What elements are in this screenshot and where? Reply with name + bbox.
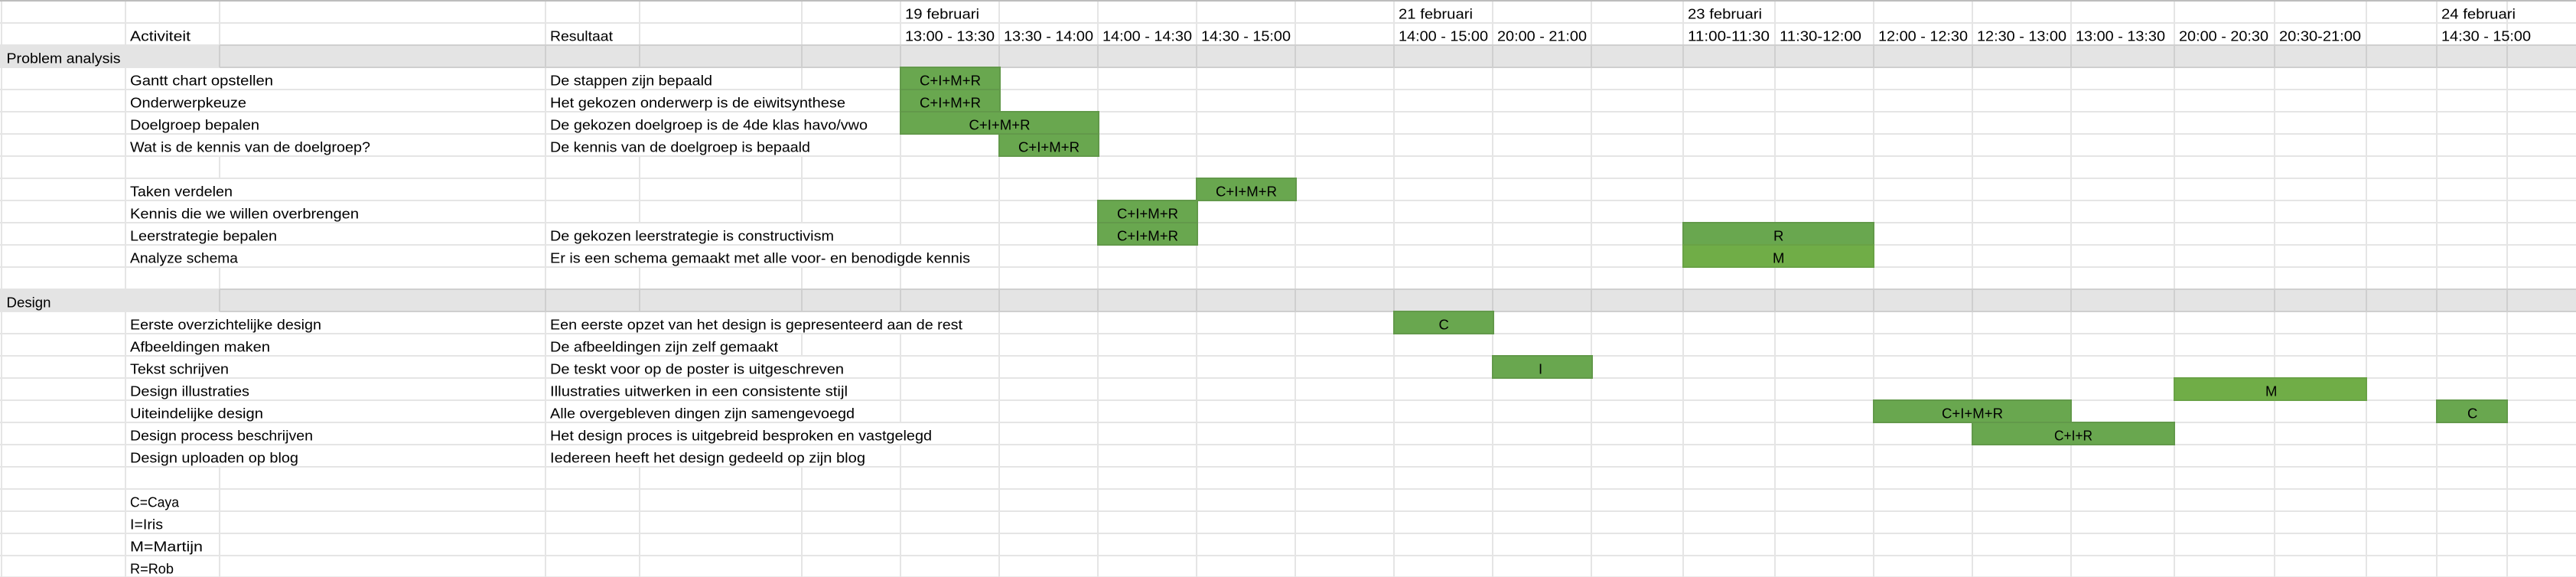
- text block: problem analysis activities: Taken verdelen: [130, 184, 233, 199]
- column heading: activity: Activiteit: [130, 28, 191, 44]
- column headers: dates and time slots: [130, 6, 2531, 44]
- time slots row: 13:30 - 14:00: [1004, 28, 1093, 44]
- time slots row: 20:00 - 21:00: [1497, 28, 1587, 44]
- bar: Uiteindelijke design C: [2437, 400, 2507, 422]
- bar: Gantt chart opstellen: C+I+M+R: [920, 72, 981, 89]
- legend: team member initials: I=Iris: [130, 516, 163, 533]
- text block: problem analysis results: De gekozen doelgroep is de 4de klas havo/vwo: [550, 116, 868, 133]
- bar: Design illustraties M: M: [2265, 383, 2277, 399]
- bar: Analyze schema M: M: [1773, 249, 1784, 266]
- text block: design activities: Afbeeldingen maken: [130, 338, 270, 355]
- text block: design results: Iedereen heeft het design gedeeld op zijn blog: [550, 450, 865, 465]
- bar: Onderwerpkeuze: C+I+M+R: [920, 95, 981, 110]
- text block: problem analysis activities: Gantt chart opstellen: [130, 72, 273, 89]
- text block: problem analysis results: De gekozen leerstrategie is constructivism: [550, 228, 834, 243]
- legend: team member initials: C=Caya: [130, 494, 180, 510]
- text block: problem analysis activities: [130, 72, 370, 266]
- heading: design: Design: [6, 294, 50, 311]
- bar: Doelgroep bepalen: [900, 112, 1099, 134]
- bar: Design process: C+I+R: [2054, 427, 2092, 444]
- text block: problem analysis activities: Analyze schema: [130, 249, 239, 266]
- date: 21 februari: 21 februari: [1399, 6, 1473, 21]
- bar: Kennis overbrengen: [1098, 200, 1197, 223]
- heading: problem analysis: Problem analysis: [6, 51, 121, 66]
- bar: Doelgroep bepalen: C+I+M+R: [969, 116, 1030, 133]
- text block: design results: Het design proces is uitgebreid besproken en vastgelegd: [550, 427, 932, 444]
- bar: Onderwerpkeuze: [900, 90, 1000, 112]
- bar: Taken verdelen: [1197, 178, 1296, 200]
- bar: Design process: [1972, 422, 2174, 445]
- legend: team member initials: M=Martijn: [130, 539, 203, 554]
- text block: design activities: Tekst schrijven: [130, 361, 229, 377]
- time slots row: 20:00 - 20:30: [2179, 28, 2268, 44]
- bar: kennis van de doelgroep: C+I+M+R: [1018, 139, 1080, 155]
- panel: design section band: [0, 288, 2576, 312]
- text block: design results: Illustraties uitwerken in een consistente stijl: [550, 383, 848, 399]
- bar: Leerstrategie bepalen: C+I+M+R: [1117, 228, 1178, 243]
- time slots row: 13:00 - 13:30: [2076, 28, 2165, 44]
- text block: design results: De afbeeldingen zijn zelf gemaakt: [550, 338, 778, 355]
- text block: design activities: Design process beschrijven: [130, 427, 313, 444]
- time slots row: 12:00 - 12:30: [1878, 28, 1968, 44]
- text block: problem analysis results: [550, 72, 970, 266]
- bar: Leerstrategie R: [1683, 223, 1874, 245]
- bar: Eerste design C: [1394, 311, 1493, 334]
- bar: Design illustraties M: [2174, 378, 2366, 400]
- time slots row: 14:00 - 15:00: [1399, 28, 1488, 44]
- text block: design activities: Eerste overzichtelijke design: [130, 317, 321, 332]
- text block: design activities: Design illustraties: [130, 383, 249, 399]
- bar: Uiteindelijke design C: C: [2467, 406, 2477, 421]
- text block: design results: Alle overgebleven dingen zijn samengevoegd: [550, 406, 855, 421]
- text block: design activities: Design uploaden op blog: [130, 450, 298, 465]
- gantt chart: problem analysis bars: [900, 67, 1874, 267]
- text block: design results: Een eerste opzet van het design is gepresenteerd aan de rest: [550, 317, 962, 332]
- bar: Uiteindelijke design: [1874, 400, 2071, 422]
- bar: Kennis overbrengen: C+I+M+R: [1117, 205, 1178, 222]
- time slots row: 12:30 - 13:00: [1977, 28, 2066, 44]
- text block: problem analysis activities: Wat is de kennis van de doelgroep?: [130, 139, 370, 155]
- text block: problem analysis activities: Onderwerpkeuze: [130, 95, 246, 110]
- text block: design activities: [130, 317, 321, 465]
- bar: kennis van de doelgroep: [999, 134, 1099, 156]
- text block: design results: De teskt voor op de poster is uitgeschreven: [550, 361, 844, 377]
- bar: Leerstrategie bepalen: [1098, 223, 1197, 245]
- legend: team member initials: R=Rob: [130, 560, 174, 577]
- bar: Analyze schema M: [1683, 245, 1874, 267]
- bar: Eerste design C: C: [1438, 317, 1449, 332]
- text block: problem analysis activities: Doelgroep bepalen: [130, 116, 259, 133]
- time slots row: 20:30-21:00: [2279, 28, 2361, 44]
- text block: design results: [550, 317, 962, 465]
- time slots row: 11:00-11:30: [1688, 28, 1770, 44]
- bar: Tekst schrijven I: [1493, 356, 1592, 378]
- time slots row: 11:30-12:00: [1780, 28, 1861, 44]
- panel: problem analysis section band: [0, 44, 2576, 68]
- bar: Uiteindelijke design: C+I+M+R: [1942, 406, 2003, 421]
- legend: team member initials: [130, 494, 203, 577]
- time slots row: 14:30 - 15:00: [1201, 28, 1291, 44]
- bar: Leerstrategie R: R: [1773, 228, 1783, 243]
- time slots row: 14:00 - 14:30: [1102, 28, 1192, 44]
- time slots row: 13:00 - 13:30: [905, 28, 995, 44]
- date: 24 februari: 24 februari: [2441, 6, 2516, 21]
- column heading: result: Resultaat: [550, 28, 613, 44]
- text block: problem analysis results: Het gekozen onderwerp is de eiwitsynthese: [550, 95, 845, 110]
- text block: design activities: Uiteindelijke design: [130, 406, 263, 421]
- text block: problem analysis activities: Kennis die we willen overbrengen: [130, 205, 359, 222]
- time slots row: 14:30 - 15:00: [2441, 28, 2531, 44]
- date: 23 februari: 23 februari: [1688, 6, 1762, 21]
- text block: problem analysis results: Er is een schema gemaakt met alle voor- en benodigde kennis: [550, 249, 970, 266]
- gantt chart: design bars: [1394, 311, 2507, 445]
- bar: Tekst schrijven I: I: [1539, 361, 1542, 377]
- date: 19 februari: 19 februari: [905, 6, 979, 21]
- bar: Gantt chart opstellen: [900, 67, 1000, 90]
- text block: problem analysis activities: Leerstrategie bepalen: [130, 228, 277, 243]
- bar: Taken verdelen: C+I+M+R: [1216, 184, 1277, 199]
- text block: problem analysis results: De kennis van de doelgroep is bepaald: [550, 139, 810, 155]
- text block: problem analysis results: De stappen zijn bepaald: [550, 72, 712, 89]
- time slots row: [905, 28, 2531, 44]
